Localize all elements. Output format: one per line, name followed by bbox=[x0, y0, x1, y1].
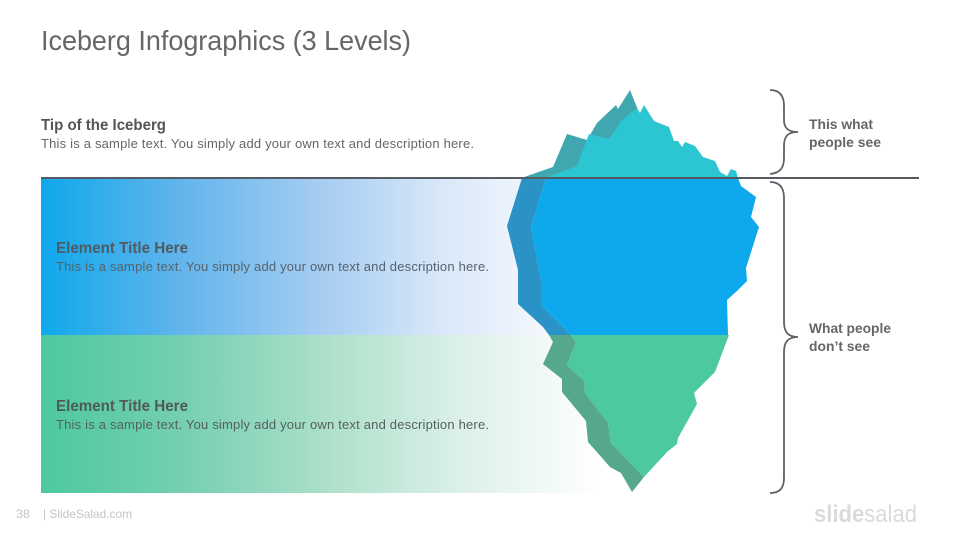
text block: blue element bbox=[56, 240, 489, 274]
text block: tip of the iceberg: This is a sample text. You simply add your own text and description here. bbox=[41, 136, 474, 151]
label: this what people see: people see bbox=[809, 134, 881, 150]
title: Iceberg Infographics (3 Levels) bbox=[41, 25, 411, 56]
iceberg bbox=[507, 90, 759, 492]
panel: blue element band bbox=[41, 179, 560, 335]
iceberg bottom shadow bbox=[543, 335, 644, 492]
label: what people don't see: What people bbox=[809, 320, 891, 336]
text block: blue element: This is a sample text. You simply add your own text and description here. bbox=[56, 259, 489, 274]
text block: green element: This is a sample text. You simply add your own text and description here. bbox=[56, 417, 489, 432]
water line bbox=[41, 177, 919, 179]
footer: site name: | SlideSalad.com bbox=[43, 507, 132, 521]
iceberg bottom bbox=[567, 335, 729, 477]
brace: what people see bbox=[770, 90, 798, 174]
footer: logo wordmark: slidesalad bbox=[814, 501, 917, 528]
label: this what people see: This what bbox=[809, 116, 873, 132]
text block: green element bbox=[56, 398, 489, 432]
panel: green element band bbox=[41, 335, 600, 493]
label: what people don't see: don’t see bbox=[809, 338, 870, 354]
text block: green element: Element Title Here bbox=[56, 398, 188, 415]
text block: tip of the iceberg bbox=[41, 117, 474, 151]
iceberg middle shadow bbox=[507, 178, 571, 335]
iceberg tip shadow bbox=[522, 90, 638, 178]
label: this what people see bbox=[809, 116, 881, 150]
iceberg tip bbox=[545, 105, 738, 178]
iceberg middle bbox=[531, 178, 759, 335]
label: what people don't see bbox=[809, 320, 891, 354]
text block: tip of the iceberg: Tip of the Iceberg bbox=[41, 117, 166, 134]
text block: blue element: Element Title Here bbox=[56, 240, 188, 257]
footer: page number: 38 bbox=[16, 507, 30, 521]
brace: what people don't see bbox=[770, 182, 798, 493]
